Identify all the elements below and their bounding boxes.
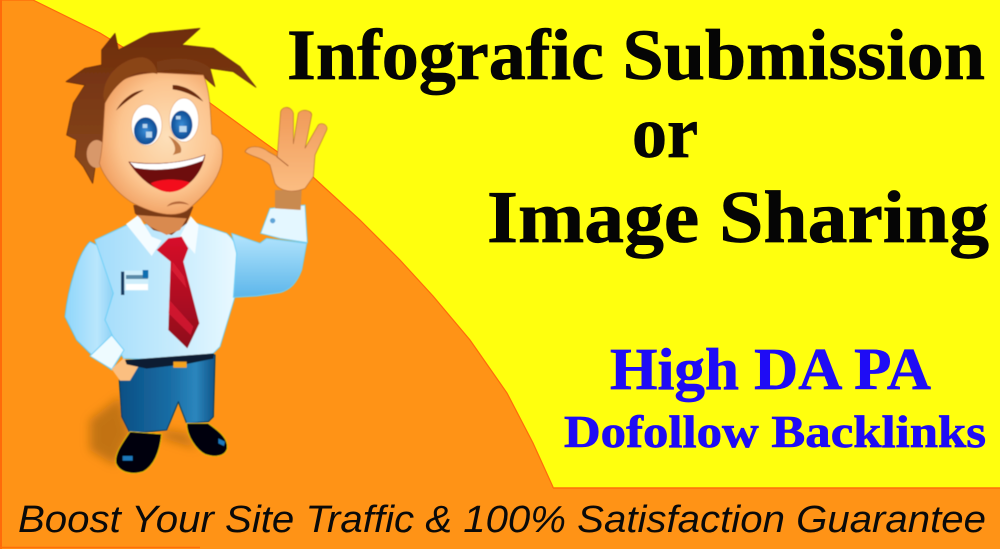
shirt cuff lower [90, 335, 124, 369]
lower body [65, 205, 307, 473]
ear [87, 140, 107, 168]
ground shadow [90, 397, 197, 465]
footer slogan: Boost Your Site Traffic & 100% Satisfaction Guarantee [18, 499, 986, 541]
nose [168, 136, 181, 155]
neck [133, 205, 193, 235]
belt [125, 353, 214, 369]
heading line 3: Image Sharing [487, 177, 989, 259]
left arm [65, 242, 123, 370]
raised arm [232, 233, 307, 297]
collar [126, 215, 162, 256]
chin mark [167, 201, 189, 207]
fringe [103, 57, 157, 103]
eyes [131, 98, 199, 146]
head and hand [66, 28, 327, 235]
heading line 1: Infografic Submission [287, 15, 985, 95]
mouth [128, 154, 205, 192]
face [99, 73, 222, 214]
waving hand [245, 107, 327, 210]
trousers [119, 355, 215, 433]
shoes [116, 423, 227, 473]
name badge [121, 270, 148, 295]
shirt cuff raised [261, 205, 307, 243]
subheading: High DA PA: High DA PA [610, 336, 931, 402]
subheading: Dofollow Backlinks: Dofollow Backlinks [564, 406, 986, 457]
back hair [66, 28, 256, 183]
hand in pocket [112, 358, 138, 381]
tie [157, 237, 199, 348]
eyebrows [116, 85, 203, 111]
illustration: waving man [65, 28, 327, 473]
heading line 2: or [632, 92, 698, 173]
shirt torso [95, 223, 237, 361]
orange curved area [1, 0, 553, 549]
